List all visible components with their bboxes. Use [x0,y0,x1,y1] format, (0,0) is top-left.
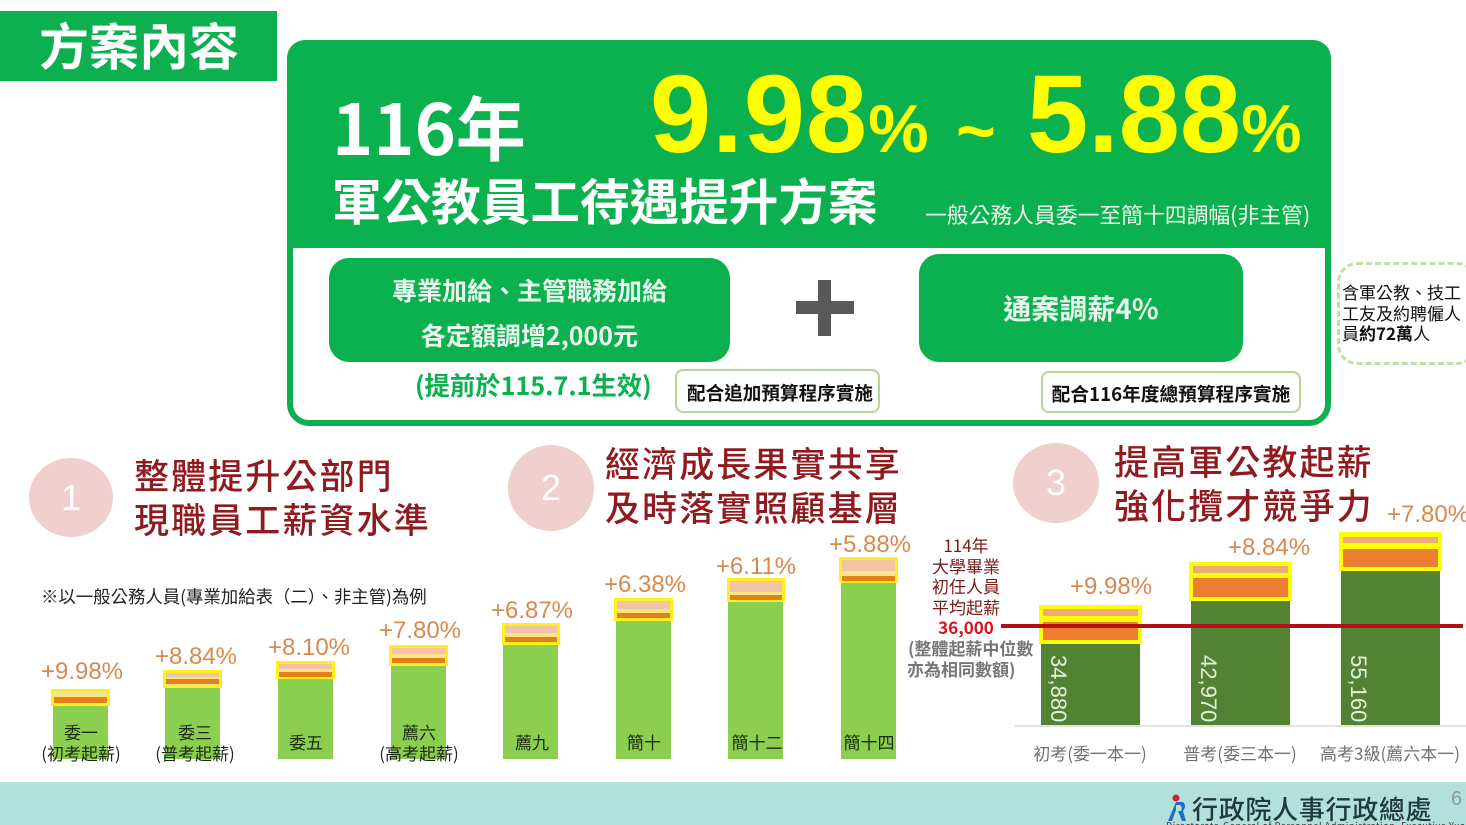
number badge 3 [1013,443,1099,523]
bar 簡十四 [829,531,911,759]
bar 薦六: (高考起薪) [379,740,459,765]
note: example scope: ※以一般公務人員(專業加給表（二）、非主管)為例 [41,584,427,609]
average pay lines: 36,000 [938,614,994,639]
panel header background [287,40,1331,248]
heading: 116年: 116年 [332,75,526,176]
average pay lines: 大學畢業 [932,552,1000,578]
heading: section 2 [605,437,902,532]
bar 初考: +9.98% [1070,573,1152,600]
bar 委一: (初考起薪) [41,740,121,765]
box: allowance increase: 各定額調增2,000元 [421,317,638,353]
bar 普考: +8.84% [1228,534,1310,561]
bar 初考: 初考(委一本一) [1033,740,1147,765]
tilde: ~ [956,93,996,169]
bar 薦九: 薦九 [515,729,549,754]
median pay remark: 亦為相同數額) [907,656,1015,680]
bar 委五 [268,634,350,759]
number badge 3: 3 [1046,462,1066,503]
median pay remark: (整體起薪中位數 [908,635,1033,660]
logo mark [1168,794,1186,821]
average pay lines: 平均起薪 [932,594,1000,618]
bar 委三 [155,643,237,765]
bar 委三: +8.84% [155,643,237,670]
number badge 2 [508,445,594,531]
bar 簡十: 簡十 [627,729,661,754]
bar 簡十四: 簡十四 [844,729,894,754]
heading: section 3: 提高軍公教起薪 [1114,435,1374,486]
bar chart: starting pay [1015,501,1466,765]
bar 薦九 [491,597,573,759]
bar 普考 [1183,534,1310,765]
bar 簡十二 [716,553,796,759]
box: allowance increase: 專業加給、主管職務加給 [392,272,667,308]
tag: supplementary budget: 配合追加預算程序實施 [687,379,873,406]
axis [1015,725,1466,727]
bar 初考: 34,880 [1046,655,1071,722]
callout: 720,000 people: 含軍公教、技工 [1342,279,1461,304]
bar 委一: 委一 [64,719,98,744]
number badge 1: 1 [61,477,81,518]
bar 簡十 [604,571,686,759]
bar 委一: +9.98% [41,658,123,685]
heading: section 2: 及時落實照顧基層 [605,481,902,532]
heading: section 3 [1114,435,1374,530]
stat: 9.98%: 9.98% [650,53,929,176]
callout: 720,000 people: 員約72萬人 [1342,320,1430,345]
footer band [0,782,1466,825]
stat: 5.88%: 5.88% [1027,53,1302,176]
callout: 720,000 people: 工友及約聘僱人 [1342,300,1461,324]
heading: section 3: 強化攬才競爭力 [1114,479,1374,530]
bar 簡十: +6.38% [604,571,686,598]
average pay lines: 初任人員 [932,573,1000,598]
bar 委五: +8.10% [268,634,350,661]
bar 高考 [1320,501,1466,765]
box: allowance increase [329,258,730,362]
tag: annual budget: 配合116年度總預算程序實施 [1052,380,1290,407]
heading: section 1: 現職員工薪資水準 [134,493,431,544]
note: average starting pay [907,532,1033,680]
bar 委三: 委三 [178,719,212,744]
median pay remark [907,635,1033,680]
panel: main proposal [287,40,1331,426]
note: range description: 一般公務人員委一至簡十四調幅(非主管) [925,199,1310,230]
heading: section 1: 整體提升公部門 [134,449,394,500]
bar 薦九: +6.87% [491,597,573,624]
average pay lines [932,532,1000,639]
number badge 1 [29,458,113,537]
title: 方案內容 [0,11,277,81]
bar 委一 [41,658,123,765]
page number: 6 [1451,788,1462,810]
icon: plus [796,280,854,336]
box: general raise: 通案調薪4% [1003,288,1159,328]
average pay lines: 114年 [943,532,989,557]
callout: 720,000 people [1337,262,1466,365]
heading: section 1 [134,449,431,544]
bar 高考: 高考3級(薦六本一) [1320,740,1460,765]
bar 薦六: 薦六 [402,719,436,744]
box: general raise [919,254,1243,362]
bar 簡十二: +6.11% [716,553,796,580]
bar 高考: 55,160 [1346,655,1371,722]
bar 委三: (普考起薪) [155,740,235,765]
bar 簡十二: 簡十二 [732,729,782,754]
bar 普考: 普考(委三本一) [1183,740,1297,765]
number badge 2: 2 [541,467,561,508]
bar 初考 [1033,573,1152,765]
bar 薦六 [379,617,461,765]
tag: supplementary budget [675,369,880,413]
heading: plan name: 軍公教員工待遇提升方案 [332,163,878,235]
bar 委五: 委五 [289,729,323,754]
heading: section 2: 經濟成長果實共享 [605,437,902,488]
tag: annual budget [1041,371,1301,413]
note: effective date: (提前於115.7.1生效) [415,367,652,403]
reference line: 36,000 [1001,624,1463,628]
bar chart: raise by grade [41,531,911,765]
bar 簡十四: +5.88% [829,531,911,558]
title: 方案內容: 方案內容 [39,8,239,80]
bar 薦六: +7.80% [379,617,461,644]
bar 普考: 42,970 [1196,655,1221,722]
